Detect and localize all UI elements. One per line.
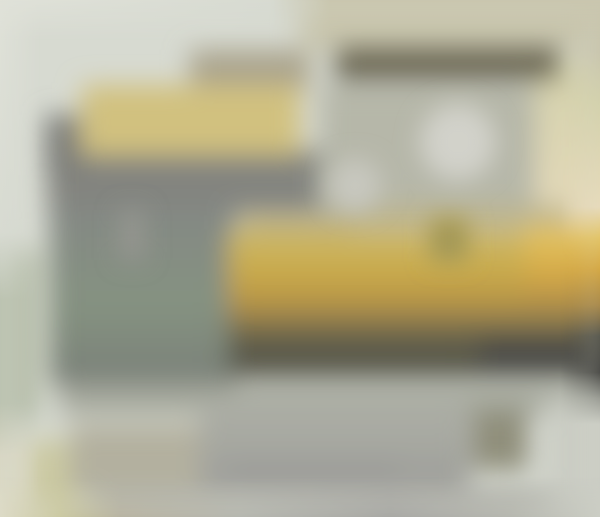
panel: bottom strip darker centre — [230, 462, 400, 488]
panel: top centre shade — [190, 50, 310, 90]
panel: bottom right light — [545, 400, 600, 517]
icon: pale blob lower — [329, 159, 381, 211]
title bar: dark band — [335, 45, 560, 81]
panel: left margin tint — [0, 250, 40, 420]
icon: pale blob upper — [420, 104, 496, 180]
panel: bottom edge — [10, 498, 582, 517]
panel: bottom grey block — [200, 400, 470, 490]
panel: light column highlight — [120, 210, 144, 260]
panel: grey upper left block — [45, 115, 81, 175]
panel: bottom left corner — [0, 440, 30, 517]
panel: grey header band — [48, 150, 320, 212]
panel: top right background — [300, 0, 600, 50]
panel: dark band right end — [480, 335, 600, 373]
panel: bottom strip — [90, 490, 550, 517]
panel: right edge — [566, 18, 600, 422]
panel: right beige background — [530, 60, 600, 230]
panel: green-grey column — [50, 205, 235, 385]
panel: tan strip above orange band — [340, 205, 570, 231]
panel: yellow heading block — [82, 85, 300, 155]
panel: lower light band — [60, 385, 600, 415]
panel: bottom left yellow strip — [28, 440, 76, 517]
panel: orange band bright right end — [525, 225, 600, 310]
panel: left edge — [0, 262, 18, 454]
panel: tan strip left of band — [240, 215, 350, 240]
panel: bottom left tan — [70, 425, 200, 495]
panel: centre light field — [320, 85, 535, 230]
panel: top edge — [39, 0, 582, 7]
icon: olive figure — [472, 410, 528, 470]
panel: orange and dark band — [228, 232, 600, 378]
panel: olive mark on band — [430, 218, 468, 262]
